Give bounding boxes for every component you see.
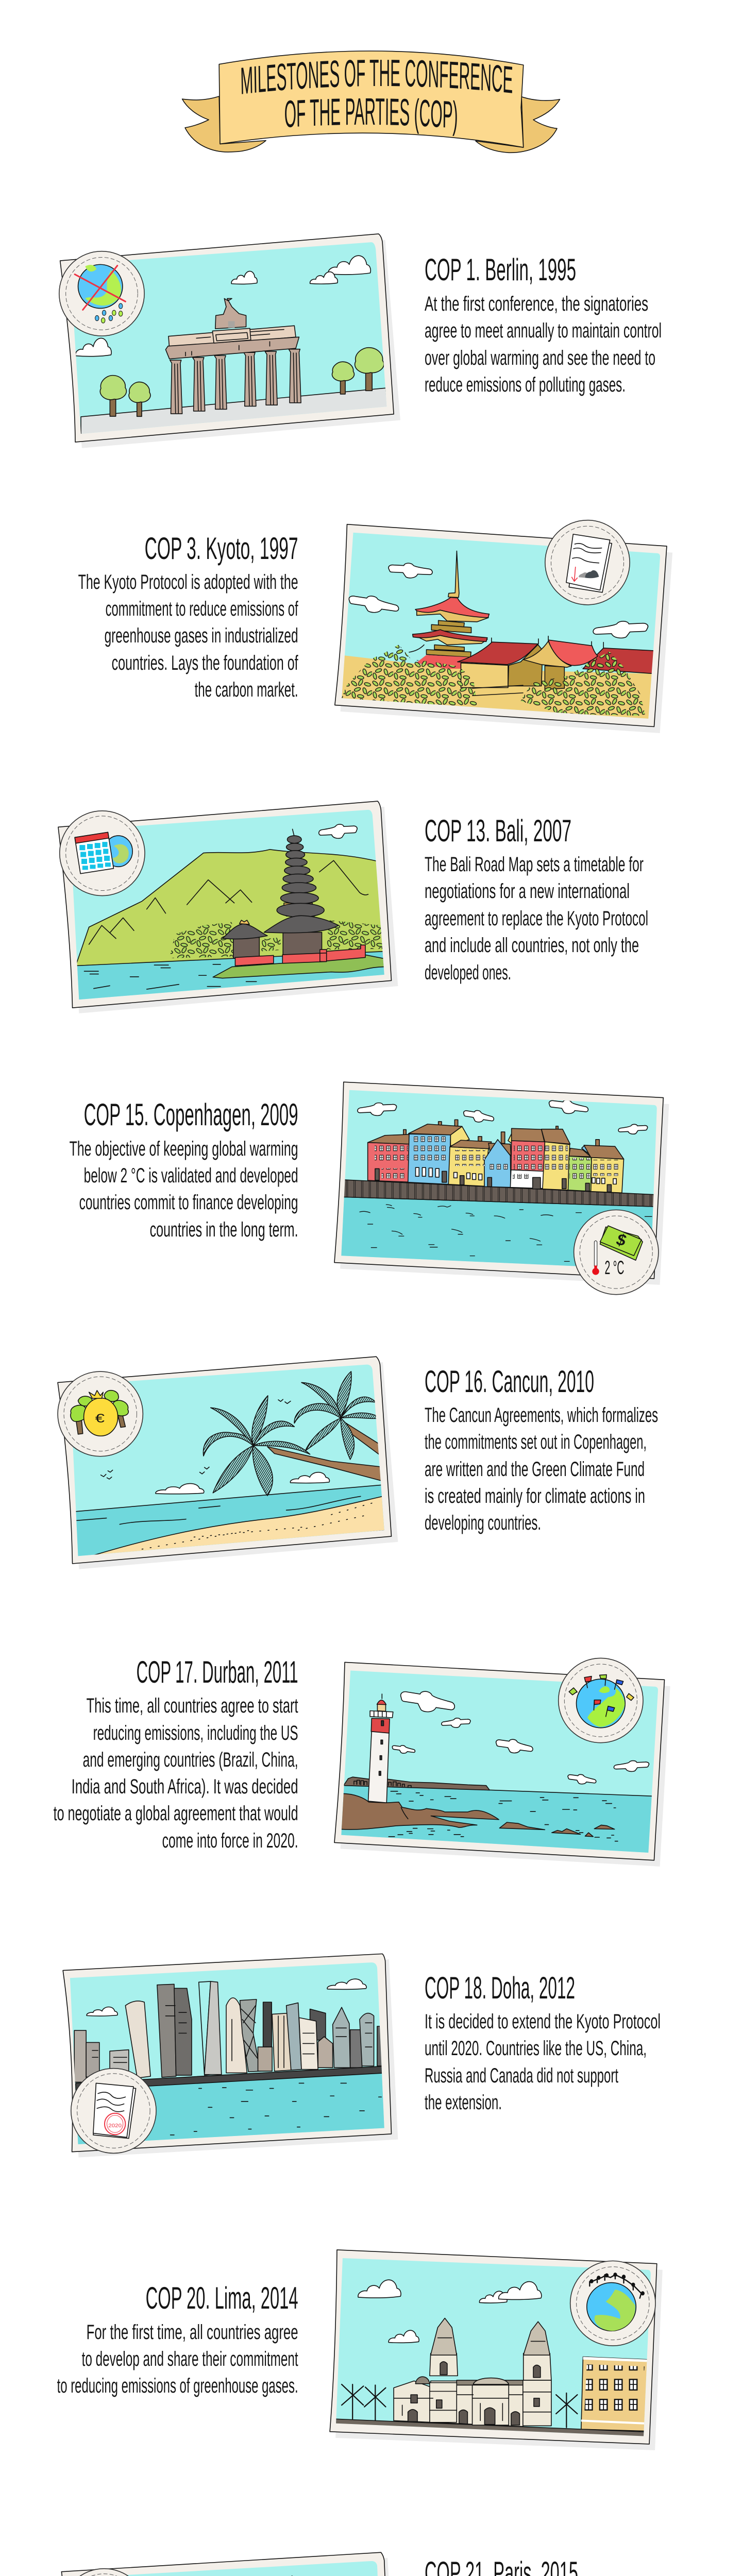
body text: COP 13 bbox=[425, 853, 648, 984]
body text: COP 16: developing countries. bbox=[425, 1512, 541, 1534]
postcard: Cancun bbox=[57, 1354, 398, 1569]
title banner bbox=[181, 50, 561, 154]
heading: COP 16: COP 16. Cancun, 2010 bbox=[425, 1364, 594, 1399]
body text: COP 17: India and South Africa). It was decided bbox=[72, 1775, 298, 1798]
body text: COP 3: countries. Lays the foundation of bbox=[112, 652, 298, 674]
body text: COP 20: For the first time, all countries agree bbox=[87, 2321, 298, 2344]
Brandenburg Gate bbox=[165, 298, 301, 414]
body text: COP 20: to develop and share their commitment bbox=[82, 2348, 298, 2370]
Doha skyline bbox=[74, 1981, 388, 2090]
body text: COP 17 bbox=[54, 1694, 298, 1852]
body text: COP 17: to negotiate a global agreement that would bbox=[54, 1802, 298, 1825]
heading: COP 20: COP 20. Lima, 2014 bbox=[146, 2281, 298, 2315]
badge: money and 2 degrees bbox=[574, 1210, 659, 1295]
body text: COP 20 bbox=[57, 2321, 298, 2397]
section: COP 17 Durban bbox=[54, 1655, 670, 1867]
body text: COP 18: the extension. bbox=[425, 2091, 502, 2114]
body text: COP 17: This time, all countries agree to start bbox=[87, 1694, 298, 1717]
body text: COP 20: to reducing emissions of greenhouse gases. bbox=[57, 2375, 298, 2397]
badge: green climate fund: € bbox=[95, 1412, 105, 1426]
Lima cathedral bbox=[394, 2318, 551, 2427]
body text: COP 17: reducing emissions, including the US bbox=[93, 1722, 298, 1744]
body text: COP 13: developed ones. bbox=[425, 961, 511, 984]
section: COP 16 Cancun bbox=[57, 1354, 658, 1569]
body text: COP 18 bbox=[425, 2010, 661, 2114]
badge: calendar and earth bbox=[60, 811, 145, 896]
heading: COP 18: COP 18. Doha, 2012 bbox=[425, 1971, 575, 2005]
body text: COP 15: The objective of keeping global warming bbox=[70, 1138, 298, 1160]
badge: green climate fund bbox=[58, 1371, 143, 1456]
Eiffel Tower bbox=[263, 2576, 342, 2577]
body text: COP 18: Russia and Canada did not support bbox=[425, 2064, 618, 2087]
heading: COP 3: COP 3. Kyoto, 1997 bbox=[145, 531, 298, 566]
badge: melting earth bbox=[59, 251, 144, 336]
body text: COP 3: The Kyoto Protocol is adopted with the bbox=[78, 571, 298, 594]
water temple bbox=[223, 829, 365, 966]
badge: thermometer 2 to 1.5 bbox=[61, 2569, 147, 2576]
body text: COP 3 bbox=[78, 571, 298, 701]
badge: money and 2 degrees: $ bbox=[615, 1230, 628, 1250]
postcard: Durban bbox=[334, 1658, 670, 1867]
body text: COP 15 bbox=[70, 1138, 298, 1241]
badge: money and 2 degrees: 2 °C bbox=[604, 1257, 624, 1278]
postcard: Bali bbox=[57, 800, 398, 1013]
section: COP 13 Bali bbox=[57, 800, 648, 1013]
bushes bbox=[170, 920, 382, 958]
body text: COP 1 bbox=[425, 293, 662, 396]
pagoda bbox=[413, 551, 489, 669]
section: COP 1 Berlin bbox=[57, 234, 662, 448]
title text line 2: OF THE PARTIES (COP) bbox=[285, 98, 457, 136]
tan building bbox=[581, 2357, 648, 2431]
body text: COP 15: countries in the long term. bbox=[150, 1218, 298, 1241]
badge: document with 2020 stamp bbox=[71, 2069, 156, 2153]
badge: earth with crown of people bbox=[570, 2261, 655, 2346]
rocky shore bbox=[341, 1793, 499, 1829]
heading: COP 17: COP 17. Durban, 2011 bbox=[137, 1655, 298, 1689]
body text: COP 17: come into force in 2020. bbox=[162, 1829, 298, 1852]
body text: COP 16 bbox=[425, 1404, 658, 1534]
postcard: Copenhagen bbox=[334, 1082, 669, 1295]
body text: COP 3: commitment to reduce emissions of bbox=[106, 598, 298, 620]
body text: COP 3: the carbon market. bbox=[195, 679, 298, 701]
temple halls bbox=[458, 636, 603, 696]
palm trees bbox=[203, 1371, 393, 1496]
body text: COP 17: and emerging countries (Brazil, China, bbox=[83, 1749, 298, 1771]
section: COP 3 Kyoto bbox=[78, 520, 672, 733]
postcard: Berlin bbox=[57, 234, 400, 448]
body text: COP 15: countries commit to finance developing bbox=[79, 1191, 298, 1214]
postcard: Lima bbox=[330, 2250, 663, 2450]
bushes bbox=[341, 645, 477, 705]
palm trees bbox=[342, 2384, 577, 2428]
body text: COP 13: negotiations for a new international bbox=[425, 880, 630, 903]
section: COP 20 Lima bbox=[57, 2250, 663, 2450]
banner ribbon bbox=[182, 51, 560, 152]
body text: COP 3: greenhouse gases in industrialized bbox=[105, 624, 298, 647]
trees bbox=[100, 348, 384, 416]
title text: MILESTONES OF THE CONFERENCE bbox=[241, 60, 512, 94]
postcard: Paris bbox=[61, 2550, 398, 2576]
postcard: Doha bbox=[61, 1954, 398, 2157]
body text: COP 15: below 2 °C is validated and developed bbox=[84, 1164, 298, 1187]
colourful harbour houses bbox=[368, 1120, 623, 1193]
heading: COP 15: COP 15. Copenhagen, 2009 bbox=[84, 1097, 298, 1132]
section: COP 18 Doha bbox=[61, 1954, 661, 2157]
section: COP 21 Paris bbox=[61, 2550, 656, 2576]
heading: COP 13: COP 13. Bali, 2007 bbox=[425, 814, 571, 848]
badge: emissions document bbox=[545, 520, 630, 605]
island bbox=[213, 955, 385, 978]
postcard: Kyoto bbox=[334, 520, 672, 733]
badge: flags on earth bbox=[559, 1658, 643, 1743]
badge: document with 2020 stamp: 2020 bbox=[108, 2123, 122, 2129]
heading: COP 1: COP 1. Berlin, 1995 bbox=[425, 252, 576, 287]
section: COP 15 Copenhagen bbox=[70, 1082, 669, 1295]
lighthouse bbox=[368, 1694, 393, 1803]
